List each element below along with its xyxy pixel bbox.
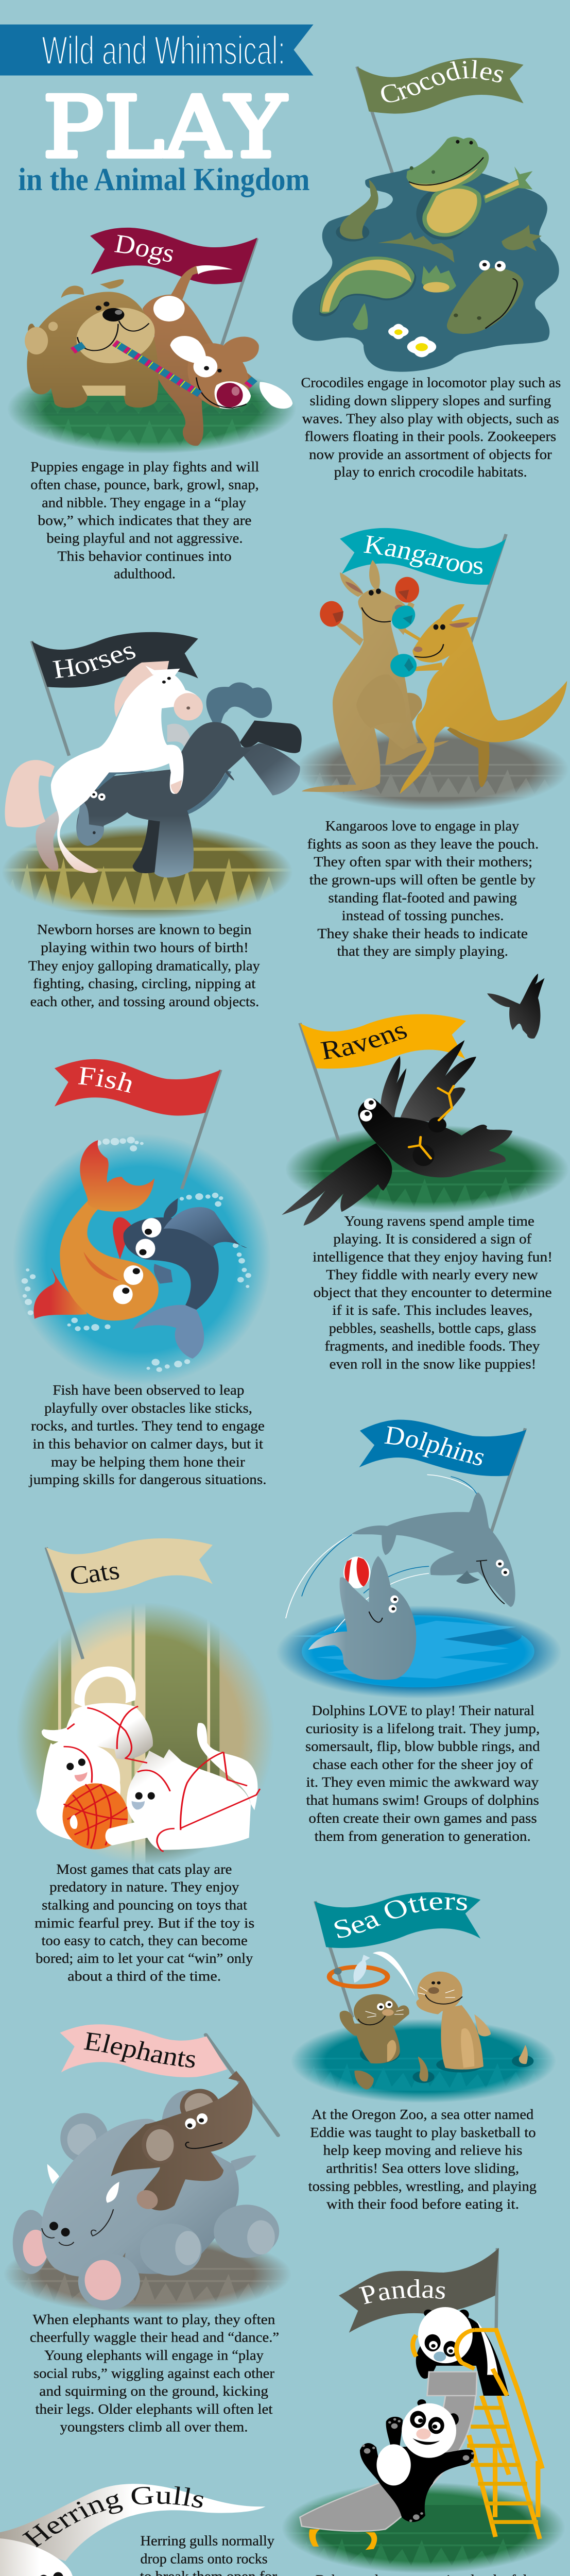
panel: herring gulls <box>0 2484 277 2576</box>
flag: Pandas: Pandas <box>358 2279 445 2304</box>
text: fish: jumping skills for dangerous situations. <box>29 1472 266 1487</box>
text: sea otters: Eddie was taught to play basketball to <box>310 2125 536 2141</box>
flag: Horses: Horses <box>53 646 136 678</box>
dirt ground <box>4 2234 291 2314</box>
text: fish: rocks, and turtles. They tend to engage <box>31 1418 265 1434</box>
flag and upper scene <box>339 2248 520 2396</box>
red yarn strings <box>64 1706 260 1852</box>
text: herring gulls <box>140 2533 277 2576</box>
yarn ball <box>62 1783 128 1849</box>
text: kangaroos <box>307 818 539 959</box>
ladder <box>467 2396 542 2539</box>
text: elephants: social rubs,” wiggling against each other <box>33 2366 274 2381</box>
text: dolphins <box>305 1703 540 1844</box>
flag: Fish: Fish <box>78 1067 132 1093</box>
flag: Elephants: Elephants <box>83 2032 195 2068</box>
text: dolphins: it. They even mimic the awkward way <box>306 1774 539 1790</box>
text: cats: too easy to catch, they can become <box>41 1933 248 1948</box>
raven <box>282 1040 512 1226</box>
text: herring gulls: Herring gulls normally <box>141 2533 274 2549</box>
text: dogs: This behavior continues into <box>58 549 232 564</box>
text: horses <box>28 922 260 1009</box>
text: cats <box>34 1861 254 1984</box>
text: fish: may be helping them hone their <box>51 1454 245 1470</box>
puppy <box>143 265 292 446</box>
text: elephants: When elephants want to play, they often <box>33 2312 275 2328</box>
flag pole <box>31 641 69 756</box>
flag pole <box>491 1428 525 1534</box>
baby elephant <box>111 2071 253 2212</box>
text: elephants: cheerfully waggle their head and “dance.” <box>30 2330 279 2345</box>
text: elephants: youngsters climb all over them. <box>60 2419 248 2435</box>
lower crocodile <box>447 260 524 334</box>
dark horse <box>76 683 302 877</box>
subtitle: in the Animal Kingdom: in the Animal Kingdom <box>18 161 310 197</box>
text: ravens: They fiddle with nearly every new <box>326 1267 538 1282</box>
text: horses: fighting, chasing, circling, nipping at <box>33 976 256 991</box>
flag: Sea Otters: Sea Otters <box>335 1896 467 1938</box>
text: ravens: object that they encounter to determine <box>314 1285 552 1300</box>
banner: Wild and Whimsical <box>0 24 314 75</box>
text: crocodiles: play to enrich crocodile habitats. <box>334 465 527 480</box>
bulldog <box>25 279 164 408</box>
flag pole <box>206 2035 278 2136</box>
small flying raven <box>487 974 545 1039</box>
top panda on ladder <box>413 2307 520 2396</box>
flag pole <box>222 239 257 345</box>
flag: Elephants <box>60 2024 227 2077</box>
text: ravens: Young ravens spend ample time <box>344 1213 534 1229</box>
text: cats: mimic fearful prey. But if the toy is <box>34 1916 254 1931</box>
upper crocodile <box>406 137 532 240</box>
text: sea otters: with their food before eating it. <box>326 2196 519 2212</box>
panel: title header <box>0 24 314 197</box>
text: fish: playfully over obstacles like sticks, <box>44 1400 252 1416</box>
text: kangaroos: instead of tossing punches. <box>342 908 504 923</box>
horse far legs <box>36 724 191 871</box>
ground and lower scene <box>282 2381 565 2576</box>
text: elephants <box>30 2312 279 2435</box>
panel: dolphins <box>279 1420 559 1844</box>
text: fish: in this behavior on calmer days, but it <box>33 1436 264 1452</box>
flag: Kangaroos <box>340 528 506 585</box>
crocodile foot, fins <box>353 225 542 330</box>
text: horses: each other, and tossing around objects. <box>30 994 259 1009</box>
white horse <box>5 661 203 873</box>
flag: Dolphins: Dolphins <box>384 1426 484 1465</box>
rope toy <box>73 343 254 394</box>
text: dogs: and nibble. They engage in a “play <box>42 495 246 511</box>
text: ravens: intelligence that they enjoy having fun! <box>313 1249 552 1265</box>
text: dolphins: them from generation to generation. <box>315 1828 531 1844</box>
text: ravens: playing. It is considered a sign of <box>333 1231 531 1247</box>
upper dolphin <box>352 1493 515 1607</box>
text: sea otters <box>308 2107 537 2212</box>
flag: Cats: Cats <box>71 1565 119 1584</box>
text: sea otters: At the Oregon Zoo, a sea otter named <box>312 2107 533 2123</box>
text: kangaroos: They shake their heads to indicate <box>317 926 528 941</box>
flag: Dogs <box>90 228 257 284</box>
text: dogs: often chase, pounce, bark, growl, snap, <box>30 477 259 493</box>
flag: Crocodiles: Crocodiles <box>381 60 504 102</box>
panel: fish <box>15 1059 269 1487</box>
straw ground <box>2 824 292 919</box>
gull head <box>0 2538 97 2576</box>
text: dogs: bow,” which indicates that they are <box>38 513 252 528</box>
text: kangaroos: Kangaroos love to engage in play <box>325 818 519 834</box>
hoop and fish <box>330 1952 415 1996</box>
slide legs <box>309 2529 377 2550</box>
water ground <box>277 1605 562 1699</box>
panel: dogs <box>9 228 294 582</box>
text: fish: Fish have been observed to leap <box>53 1382 244 1398</box>
water circle <box>13 1134 271 1384</box>
flag wing: Herring Gulls <box>0 2481 265 2561</box>
bubbles <box>22 1137 251 1372</box>
text: cats: predatory in nature. They enjoy <box>49 1879 239 1895</box>
striped wall backdrop <box>16 1602 274 1865</box>
text: kangaroos: standing flat-footed and pawing <box>329 890 517 906</box>
beach ball <box>343 1556 370 1588</box>
grass ground <box>285 1125 569 1213</box>
panel: sea otters <box>292 1892 554 2212</box>
flag: Horses <box>32 632 198 688</box>
text: sea otters: help keep moving and relieve his <box>323 2143 523 2158</box>
text: elephants: Young elephants will engage in “play <box>44 2348 264 2363</box>
panel: cats <box>19 1538 271 1984</box>
flag: Pandas <box>339 2248 499 2333</box>
panel: kangaroos <box>300 528 567 959</box>
text: dolphins: somersault, flip, blow bubble rings, and <box>305 1739 540 1754</box>
flag: Dogs: Dogs <box>114 235 173 265</box>
flag: Ravens <box>300 1014 466 1069</box>
dirt ground <box>296 728 569 811</box>
banner: Wild and Whimsical: Wild and Whimsical: <box>42 28 285 73</box>
flag: Dolphins <box>359 1420 526 1477</box>
flag pole <box>357 66 396 185</box>
right otter <box>416 1972 491 2072</box>
top cat <box>42 1667 153 1759</box>
text: ravens <box>313 1213 552 1372</box>
text: dogs: being playful and not aggressive. <box>46 531 243 546</box>
text: dolphins: chase each other for the sheer joy of <box>313 1757 533 1772</box>
text: cats: about a third of the time. <box>67 1969 221 1984</box>
flag wing: Herring Gulls: Herring Gulls <box>22 2486 203 2547</box>
otter tails <box>412 2045 533 2083</box>
text: fish <box>29 1382 266 1487</box>
title: PLAY: PLAY <box>43 79 287 177</box>
text: horses: playing within two hours of birth! <box>41 940 249 955</box>
splash arcs <box>286 1475 477 1632</box>
text: cats: stalking and pouncing on toys that <box>42 1897 248 1913</box>
text: ravens: fragments, and inedible foods. They <box>324 1338 540 1354</box>
text: ravens: pebbles, seashells, bottle caps, glass <box>329 1320 536 1336</box>
right cat <box>106 1723 258 1850</box>
text: crocodiles <box>301 375 561 480</box>
blue fish <box>124 1198 247 1359</box>
text: cats: Most games that cats play are <box>56 1861 232 1877</box>
text: cats: bored; aim to let your cat “win” only <box>36 1951 253 1966</box>
text: dogs: adulthood. <box>114 566 176 582</box>
text: sea otters: arthritis! Sea otters love sliding, <box>326 2161 519 2176</box>
left otter <box>340 1994 409 2090</box>
crocodile tail and ridge <box>336 180 454 263</box>
panel: horses <box>4 632 302 1010</box>
text: dolphins: that humans swim! Groups of dolphins <box>306 1792 539 1808</box>
text: kangaroos: the grown-ups will often be gentle by <box>309 872 536 888</box>
flag pole <box>315 1901 353 2018</box>
flag: Fish <box>55 1059 220 1116</box>
text: ravens: even roll in the snow like puppies! <box>330 1357 536 1372</box>
text: kangaroos: They often spar with their mothers; <box>314 854 532 870</box>
left cat <box>37 1735 120 1841</box>
big elephant <box>13 2090 279 2310</box>
kangaroo: tan boxer <box>302 560 449 792</box>
flag: Ravens: Ravens <box>320 1026 407 1059</box>
text: horses: Newborn horses are known to begin <box>37 922 252 937</box>
text: dogs: Puppies engage in play fights and will <box>30 460 259 475</box>
text: kangaroos: that they are simply playing. <box>337 944 508 959</box>
text: elephants: their legs. Older elephants will often let <box>35 2401 273 2417</box>
text: elephants: and squirming on the ground, kicking <box>39 2383 268 2399</box>
kangaroo: golden boxer <box>388 602 567 794</box>
text: horses: They enjoy galloping dramatically, play <box>28 958 260 974</box>
flag: Cats <box>46 1538 213 1593</box>
text: ravens: if it is safe. This includes leaves, <box>332 1302 532 1318</box>
lower dolphin <box>308 1556 416 1680</box>
text: herring gulls: drop clams onto rocks <box>141 2551 268 2567</box>
text: kangaroos: fights as soon as they leave the pouch. <box>307 836 539 852</box>
text: dolphins: curiosity is a lifelong trait. They jump, <box>306 1721 540 1736</box>
grass ground <box>282 2482 565 2573</box>
panel: elephants <box>6 2024 289 2435</box>
panel: pandas <box>284 2248 563 2576</box>
flag: Kangaroos: Kangaroos <box>364 535 482 574</box>
grass ground <box>9 378 294 453</box>
text: dolphins: Dolphins LOVE to play! Their natural <box>312 1703 534 1718</box>
flag pole <box>182 1070 221 1189</box>
lower panda <box>360 2399 474 2522</box>
crocodile big tail <box>319 257 416 316</box>
text: sea otters: tossing pebbles, wrestling, and playing <box>308 2179 537 2194</box>
pond <box>292 166 559 372</box>
flag pole <box>300 1023 339 1142</box>
flag pole <box>496 2248 497 2329</box>
water flowers <box>388 324 436 357</box>
text: dogs <box>30 460 259 582</box>
text: dolphins: often create their own games and pass <box>308 1810 537 1826</box>
panel: ravens <box>282 974 567 1372</box>
orange fish <box>33 1140 159 1320</box>
flag pole <box>469 534 506 649</box>
panel: crocodiles <box>292 58 561 480</box>
flag pole <box>46 1548 83 1659</box>
water ground <box>291 2019 556 2103</box>
slide <box>300 2381 476 2531</box>
